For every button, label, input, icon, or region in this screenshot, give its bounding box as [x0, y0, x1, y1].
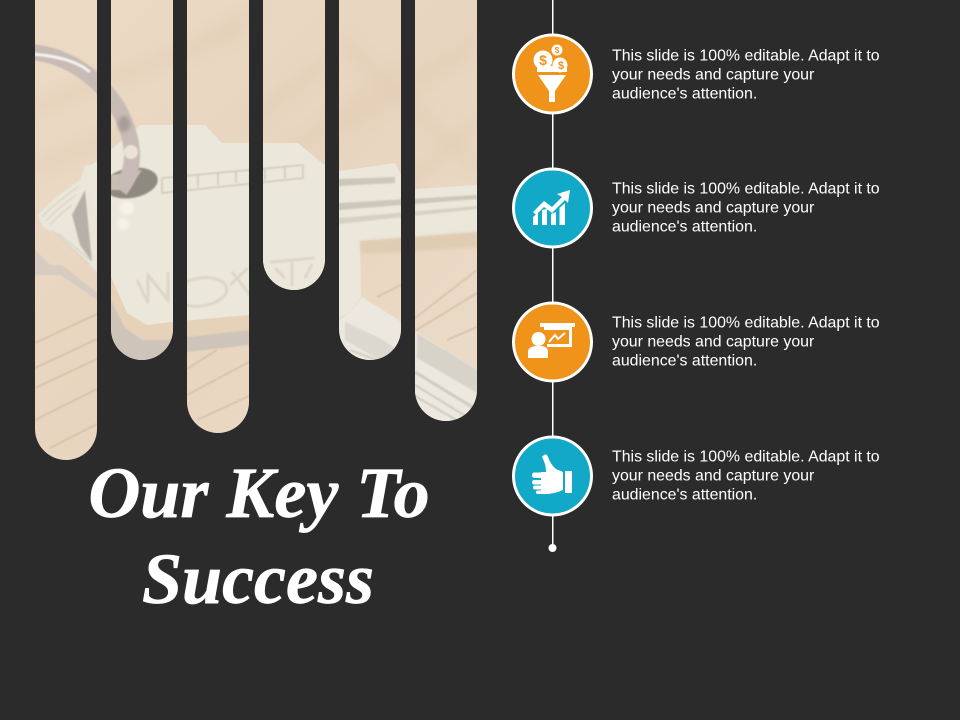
beads: [117, 201, 134, 230]
table shadow under key: [111, 300, 249, 364]
second key under main key: [35, 165, 97, 300]
text block: [612, 314, 880, 370]
icon: funnel with coins: $: [555, 46, 560, 55]
text block: audience's attention.: [612, 218, 757, 236]
text block: This slide is 100% editable. Adapt it to: [612, 48, 880, 64]
text block: your needs and capture your: [612, 334, 815, 350]
text block: your needs and capture your: [612, 468, 815, 484]
timeline line: [548, 0, 556, 552]
text block: [612, 180, 880, 236]
text block: [612, 448, 880, 504]
key blade shadow: [360, 232, 477, 254]
lower metal blade: [339, 297, 477, 421]
text block: your needs and capture your: [612, 200, 815, 216]
icon: thumbs up: [514, 437, 592, 515]
text block: This slide is 100% editable. Adapt it to: [612, 448, 880, 466]
wood grain lines: [35, 270, 477, 448]
text block: audience's attention.: [612, 86, 757, 102]
icon: funnel with coins: $: [558, 60, 564, 72]
icon: rising bar chart: [514, 169, 592, 247]
key embossed pattern: [162, 165, 303, 193]
title: [88, 453, 430, 619]
text block: your needs and capture your: [612, 66, 815, 84]
item 3: [514, 303, 880, 381]
key thickness edge: [111, 278, 249, 340]
key ring: [30, 52, 138, 190]
text block: [612, 48, 880, 102]
text block: This slide is 100% editable. Adapt it to: [612, 180, 880, 198]
icon: funnel with coins: [514, 35, 592, 113]
key hole: [111, 166, 158, 200]
text block: This slide is 100% editable. Adapt it to: [612, 314, 880, 332]
title: Our Key To: [88, 453, 430, 533]
item 4: [514, 437, 880, 515]
item 1: [514, 35, 880, 113]
key blade grooves: [339, 177, 477, 224]
item 2: [514, 169, 880, 247]
text block: audience's attention.: [612, 486, 757, 504]
photo strips: keys on wooden table: [30, 0, 480, 470]
title: Success: [142, 539, 374, 619]
icon: funnel with coins: $: [539, 52, 547, 68]
icon: presenter with board: [514, 303, 592, 381]
key head: [85, 125, 477, 325]
text block: audience's attention.: [612, 352, 757, 370]
